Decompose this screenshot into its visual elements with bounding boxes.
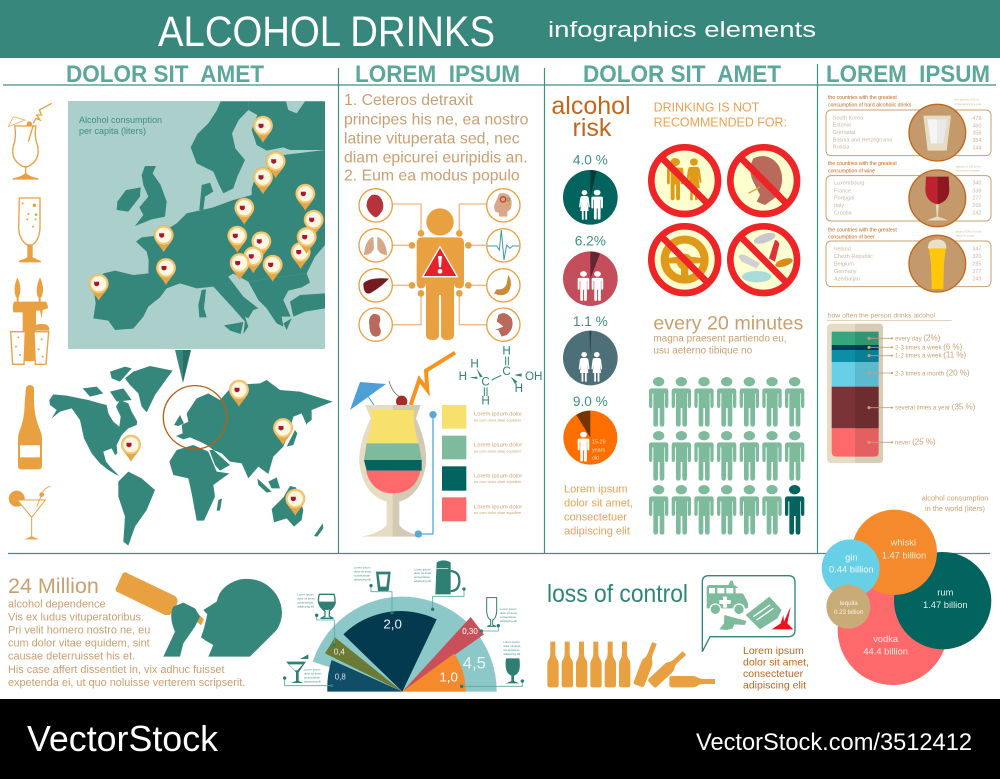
text block: ceteros: principes his ne, ea nostro [344,112,529,128]
sector 0,4: 0,4 [334,648,345,657]
risk circles [563,152,633,538]
icon: beer tap with glasses [11,277,49,364]
wine: 277 [972,196,981,202]
footer band [0,699,1000,779]
prohibition signs [651,147,797,293]
heading: alcohol risk: alcohol [551,92,631,120]
small captions: consectetuer [354,573,370,577]
sign: children [651,147,718,214]
text block: ceteros: latine vituperata sed, nec [344,130,520,148]
labels: never (25 %) [895,437,936,446]
risk circle 9.0: years [592,448,605,454]
panel: europe map [68,101,325,349]
hard alcohol: 358 [972,131,981,137]
icon: tumbler [376,572,391,591]
small captions: adipiscing elit [414,579,431,583]
small captions: adipiscing elit [354,577,371,581]
bubble: vodka: 44.4 billion [863,646,908,656]
risk circles: 1.1 % [573,314,608,329]
risk circles: 6.2% [575,234,606,249]
text: lorem ipsum loss of control: adipiscing elit [743,680,806,692]
hard alcohol: 344 [972,145,981,151]
bubble: rum [894,552,991,649]
molecule: ethanol: H [502,345,511,358]
world pins [121,380,305,516]
small captions: dolor sit amet, [414,571,432,575]
heading: alcohol risk [551,92,631,142]
world map [49,366,333,546]
beer: mugs of 500 ml on the [955,229,982,233]
footer url: VectorStock.com/3512412 [696,729,972,756]
sign: steering wheel [651,226,718,293]
beer: Ireland [834,246,851,252]
icon: pulse [487,230,519,260]
title: ALCOHOL DRINKS [158,8,495,56]
icon: martini glass [9,486,51,539]
icon: wine glass [506,658,520,683]
icon: margarita [286,654,308,683]
wine: glasses of 200 ml on [956,165,981,169]
beer: 285 [972,261,981,267]
beer: Belgium [834,261,854,267]
hard alcohol: nine glasses of 50 ml [954,98,979,102]
text: 24 million: expetenda ei, ut quo noluisse verterem scripserit. [8,677,245,689]
icon: crashed car [746,597,782,629]
small captions: consectetuer [304,675,320,679]
text: every 20 minutes: magna praesent partiendo eu, [653,334,787,345]
bubble chart [822,510,991,685]
legend: eu cum dolor vitae equidem [474,449,521,453]
bubble: rum: rum [937,587,954,597]
molecule: ethanol [459,345,542,408]
header band [0,0,1000,58]
icon: stomach [494,275,511,295]
small captions: Lorem ipsum [297,592,314,596]
text block: ceteros: 1. Ceteros detraxit [344,92,474,109]
icon: cocktail outline [8,103,52,179]
bubble: whiski [852,510,937,595]
text block: ceteros: 2. Eum ea modus populo [344,168,520,184]
risk circles: 9.0 % [573,394,608,409]
glass column [827,324,883,463]
chart: how often the person drinks [827,313,976,463]
text: every 20 minutes: every 20 minutes [653,313,803,334]
bubble: vodka: vodka [873,634,899,644]
cocktail glass chart [350,353,522,538]
labels [895,333,976,446]
speech bubble with accident icons [702,576,795,652]
small captions [297,566,521,683]
beer: Azerbaijan [834,276,860,282]
sector 0,30: 0,30 [462,627,478,636]
molecule: ethanol: H [459,370,467,383]
icon: brandy glass [318,594,336,618]
caption: Alcohol consumption [79,115,162,125]
hard alcohol: Bosnia and Herzegovina [833,137,893,143]
hard alcohol [826,95,991,161]
beer: 320 [972,254,981,260]
icon: beer mug [435,560,459,594]
bubble: rum: 1.47 billion [923,600,968,610]
hard alcohol: Grenadal [833,130,855,136]
heading: drinking not recommended [654,101,787,130]
people pictogram [649,377,804,535]
text: lorem ipsum loss of control: Lorem ipsum [743,645,804,657]
hard alcohol: the countries with the greatest [828,95,897,101]
wine: 242 [972,210,981,216]
legend: Lorem ipsum dolor [474,443,522,449]
risk circles: 4.0 % [573,152,608,167]
sector 1,0: 1,0 [439,670,458,685]
sector 0,4 [325,637,402,692]
text: 24 million: Pri velit homero nostro ne, eu [8,624,150,636]
heading: alcohol risk: risk [573,114,612,142]
risk circle 9.0: old [592,455,599,461]
text: every 20 minutes [653,313,803,356]
section heading: lorem ipsum 1: LOREM IPSUM [355,61,520,88]
text: lorem ipsum orange: adipiscing elit [564,526,630,538]
map pins [89,116,324,301]
risk circle 4.0 [563,170,618,225]
glass [359,405,426,537]
sector 0,8 [327,660,402,692]
sector 0,8: 0,8 [335,672,346,681]
risk circle 9.0: 15-29 [592,439,606,445]
icon: person drinking [115,572,282,657]
wine: France [834,188,851,194]
icon: head with gears [494,193,512,217]
legend: Lorem ipsum dolor [474,412,522,418]
labels: 2-3 times a week (6 %) [895,342,963,351]
icon: lungs [364,237,387,255]
bubble: tequila [826,585,870,629]
small captions: consectetuer [500,615,516,619]
icon: heart [367,195,383,217]
wine: Luxembourg [834,181,864,187]
subtitle: infographics elements [548,17,816,42]
small captions: consectetuer [503,648,520,652]
small captions: dolor sit amet, [354,569,372,573]
bubble: gin: gin [845,552,858,562]
hard alcohol: on the person in a year [954,102,981,106]
leaders [285,586,522,686]
heading: drinking not recommended: DRINKING IS NOT [654,101,760,115]
legend: eu cum dolor vitae equidem [474,480,521,484]
bubble: tequila: 0.23 billion [834,609,864,616]
text: 24 million: 24 Million [8,574,99,598]
wine: Italy [834,203,844,209]
text: lorem ipsum loss of control: consectetuer [743,668,804,680]
beer: the countries with the greatest [828,227,897,233]
molecule: ethanol: C [481,376,490,389]
sign: fetus [730,147,797,214]
icon: flute [487,598,497,626]
small captions: dolor sit amet, [304,671,322,675]
sector 2,0 [343,611,437,692]
bubble: whiski: whiski [890,538,916,548]
beer: Chezh Republic [834,254,873,260]
warning triangle [423,247,457,277]
icon: beer flute outline [19,198,41,262]
wine: the countries with the greatest [828,161,897,167]
wine [826,161,991,227]
hard alcohol: 354 [972,138,981,144]
Europe landmass [93,101,325,334]
molecule: ethanol: C [502,365,511,378]
icon: explosion [772,607,793,629]
panel: top countries [826,95,991,292]
bubble: vodka [838,575,948,685]
sector 0,30 [402,617,484,692]
cherry [389,381,407,407]
label 4,5: 4,5 [463,653,486,672]
sector 1,0 [402,654,466,692]
beer: consumption of beer [828,235,875,241]
text: 24 million [8,574,245,689]
falling bottles [547,641,715,688]
legend: Lorem ipsum dolor [474,504,522,510]
text: every 20 minutes: usu aeterno tibique no [653,345,753,356]
heading: loss of control: loss of control [547,580,688,608]
beer: person in a year [955,234,974,238]
beer: 243 [972,276,981,282]
sign: pills [730,226,797,293]
legend: Lorem ipsum dolor [474,473,522,479]
small captions: adipiscing elit [304,679,321,683]
body diagram with organs [359,189,520,341]
hard alcohol: 478 [972,116,981,122]
molecule: ethanol: H [470,358,479,371]
text: alcohol consumption in the world: in the world (liters) [925,504,985,513]
risk circle 6.2 [563,251,618,306]
hard alcohol: Russia [833,145,850,151]
beer: 277 [972,269,981,275]
small captions: Lorem ipsum [414,567,431,571]
text: lorem ipsum orange: dolor sit amet, [564,498,633,510]
organ circles [359,189,520,341]
icon: champagne bottle [18,385,42,469]
bubble: whiski: 1.47 billion [882,550,926,560]
text: lorem ipsum orange [564,484,633,538]
text: 24 million: alcohol dependence [8,598,106,610]
wine: Croatia [834,210,853,216]
hard alcohol: consumption of hard alcoholic drinks [828,102,912,108]
risk circle 1.1 [563,331,618,385]
small captions: Lorem ipsum [304,668,321,672]
small captions: Lorem ipsum [500,607,517,611]
pointer from world map to europe [175,350,191,383]
legend: eu cum dolor vitae equidem [474,511,521,515]
wine: 340 [972,181,981,187]
hard alcohol: Estonia [833,123,852,129]
bubble: gin [822,539,880,597]
blue connector [415,411,437,538]
chart title: how often the person drinks alcohol [828,313,936,320]
text: lorem ipsum loss of control: dolor sit amet, [743,656,809,668]
text: alcohol consumption in the world [922,494,988,513]
text: alcohol consumption in the world: alcohol consumption [922,494,988,503]
molecule: ethanol: OH [525,370,542,383]
sector 2,0: 2,0 [383,616,402,631]
small captions: adipiscing elit [297,604,315,608]
beer: Germany [834,269,857,275]
layers [367,410,419,443]
text: 24 million: His case affert dissentiet in, vix adhuc fuisset [8,664,225,676]
labels: every day (2%) [895,333,941,342]
wine: the person in a year [956,169,980,173]
connectors [392,204,487,325]
small captions: Lorem ipsum [503,640,520,644]
small captions: consectetuer [297,600,314,604]
straw [411,353,455,405]
beer [826,227,991,292]
icon: liver [363,278,389,294]
wine: Portugal [834,196,854,202]
chart: semicircle sectors [283,560,524,692]
section heading: lorem ipsum 2: LOREM IPSUM [826,61,990,88]
text: lorem ipsum orange: consectetuer [564,512,627,524]
small captions: dolor sit amet, [500,611,518,615]
text: lorem ipsum loss of control [743,645,809,692]
small captions: adipiscing elit [503,652,521,656]
wine: 339 [972,188,981,194]
text: 24 million: Vis ex ludus vituperatoribus. [8,612,144,624]
icon: kidney [369,314,381,337]
umbrella [350,382,386,410]
risk circle 9.0 [563,411,617,465]
legend [442,405,522,521]
molecule: ethanol: H [515,382,523,395]
section heading: dolor sit amet 2: DOLOR SIT AMET [583,61,781,88]
hard alcohol: South Korea [833,115,864,121]
bubble: tequila: tequila [840,600,858,607]
person figure [417,208,464,340]
small captions: dolor sit amet, [503,644,521,648]
leaders [868,337,893,443]
wine: 266 [972,203,981,209]
icon: ambulance [707,581,748,615]
legend: eu cum dolor vitae equidem [474,418,521,422]
beer: 347 [972,246,981,252]
text: 24 million: cum dolor vitae equidem, sint [8,638,150,650]
text block: ceteros [344,92,529,184]
footer logo: VectorStock [27,718,219,759]
text: lorem ipsum orange: Lorem ipsum [564,484,627,496]
small captions: dolor sit amet, [297,596,315,600]
text block: ceteros: diam epicurei euripidis an. [344,150,528,166]
molecule: ethanol: H [481,395,490,408]
wine: consumption of wine [828,168,875,174]
panel: europe map: per capita (liters) [79,126,146,136]
europe highlight circle [163,386,227,449]
text: 24 million: causae deterruisset his et. [8,650,135,662]
hard alcohol: 460 [972,123,981,129]
labels: 1-2 times a week (11 %) [895,351,967,360]
small captions: adipiscing elit [500,619,517,623]
heading: drinking not recommended: RECOMMENDED FOR: [654,116,787,130]
icon: gun [719,615,747,630]
section heading: dolor sit amet 1: DOLOR SIT AMET [66,61,264,88]
small captions: Lorem ipsum [354,566,371,570]
small captions: consectetuer [414,575,430,579]
labels: 2-3 times a month (20 %) [895,368,970,377]
labels: several times a year (35 %) [895,403,976,412]
bubble: gin: 0.44 billion [829,565,874,575]
icon: fetus [495,313,513,337]
